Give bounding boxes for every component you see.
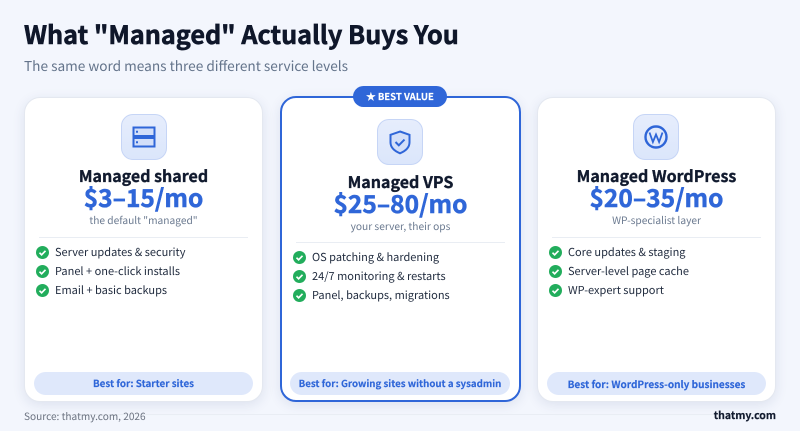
feature: expert support: WP-expert support [568,282,664,298]
icon: server [121,114,167,160]
plan name: Managed shared [79,163,208,187]
price: $3–15/mo [84,180,203,215]
descriptor: your server, their ops [351,218,450,233]
descriptor: WP-specialist layer [612,212,701,227]
feature: panel backups: Panel, backups, migrations [312,287,450,303]
icon: wordpress [633,114,679,160]
panel: managed VPS [280,96,521,402]
feature: server updates: Server updates & security [55,244,185,260]
price: $20–35/mo [589,180,724,215]
brand: thatmy.com [714,408,776,423]
descriptor: the default "managed" [89,212,198,227]
badge: best value: ★ BEST VALUE [366,89,434,103]
title: What "Managed" Actually Buys You [24,16,459,52]
feature: email: Email + basic backups [55,282,167,298]
panel: managed shared [24,97,263,402]
best for: Best for: Growing sites without a sysadmin [299,376,501,390]
feature: panel: Panel + one-click installs [55,263,180,279]
feature: monitoring: 24/7 monitoring & restarts [312,268,446,284]
feature: page cache: Server-level page cache [568,263,689,279]
best for [34,372,253,395]
feature: core updates: Core updates & staging [568,244,686,260]
source: Source: thatmy.com, 2026 [24,408,146,423]
best for: Best for: Starter sites [93,376,194,390]
plan name: Managed WordPress [577,163,736,187]
price: $25–80/mo [333,186,468,221]
plan name: Managed VPS [348,169,453,193]
best for: Best for: WordPress-only businesses [568,376,745,391]
panel: managed wordpress [537,97,776,402]
feature: OS patching: OS patching & hardening [312,249,439,265]
best for [290,372,510,395]
subtitle: The same word means three different service levels [24,55,348,75]
icon: shield [377,119,423,165]
badge: best value [353,86,447,107]
best for [547,372,766,395]
